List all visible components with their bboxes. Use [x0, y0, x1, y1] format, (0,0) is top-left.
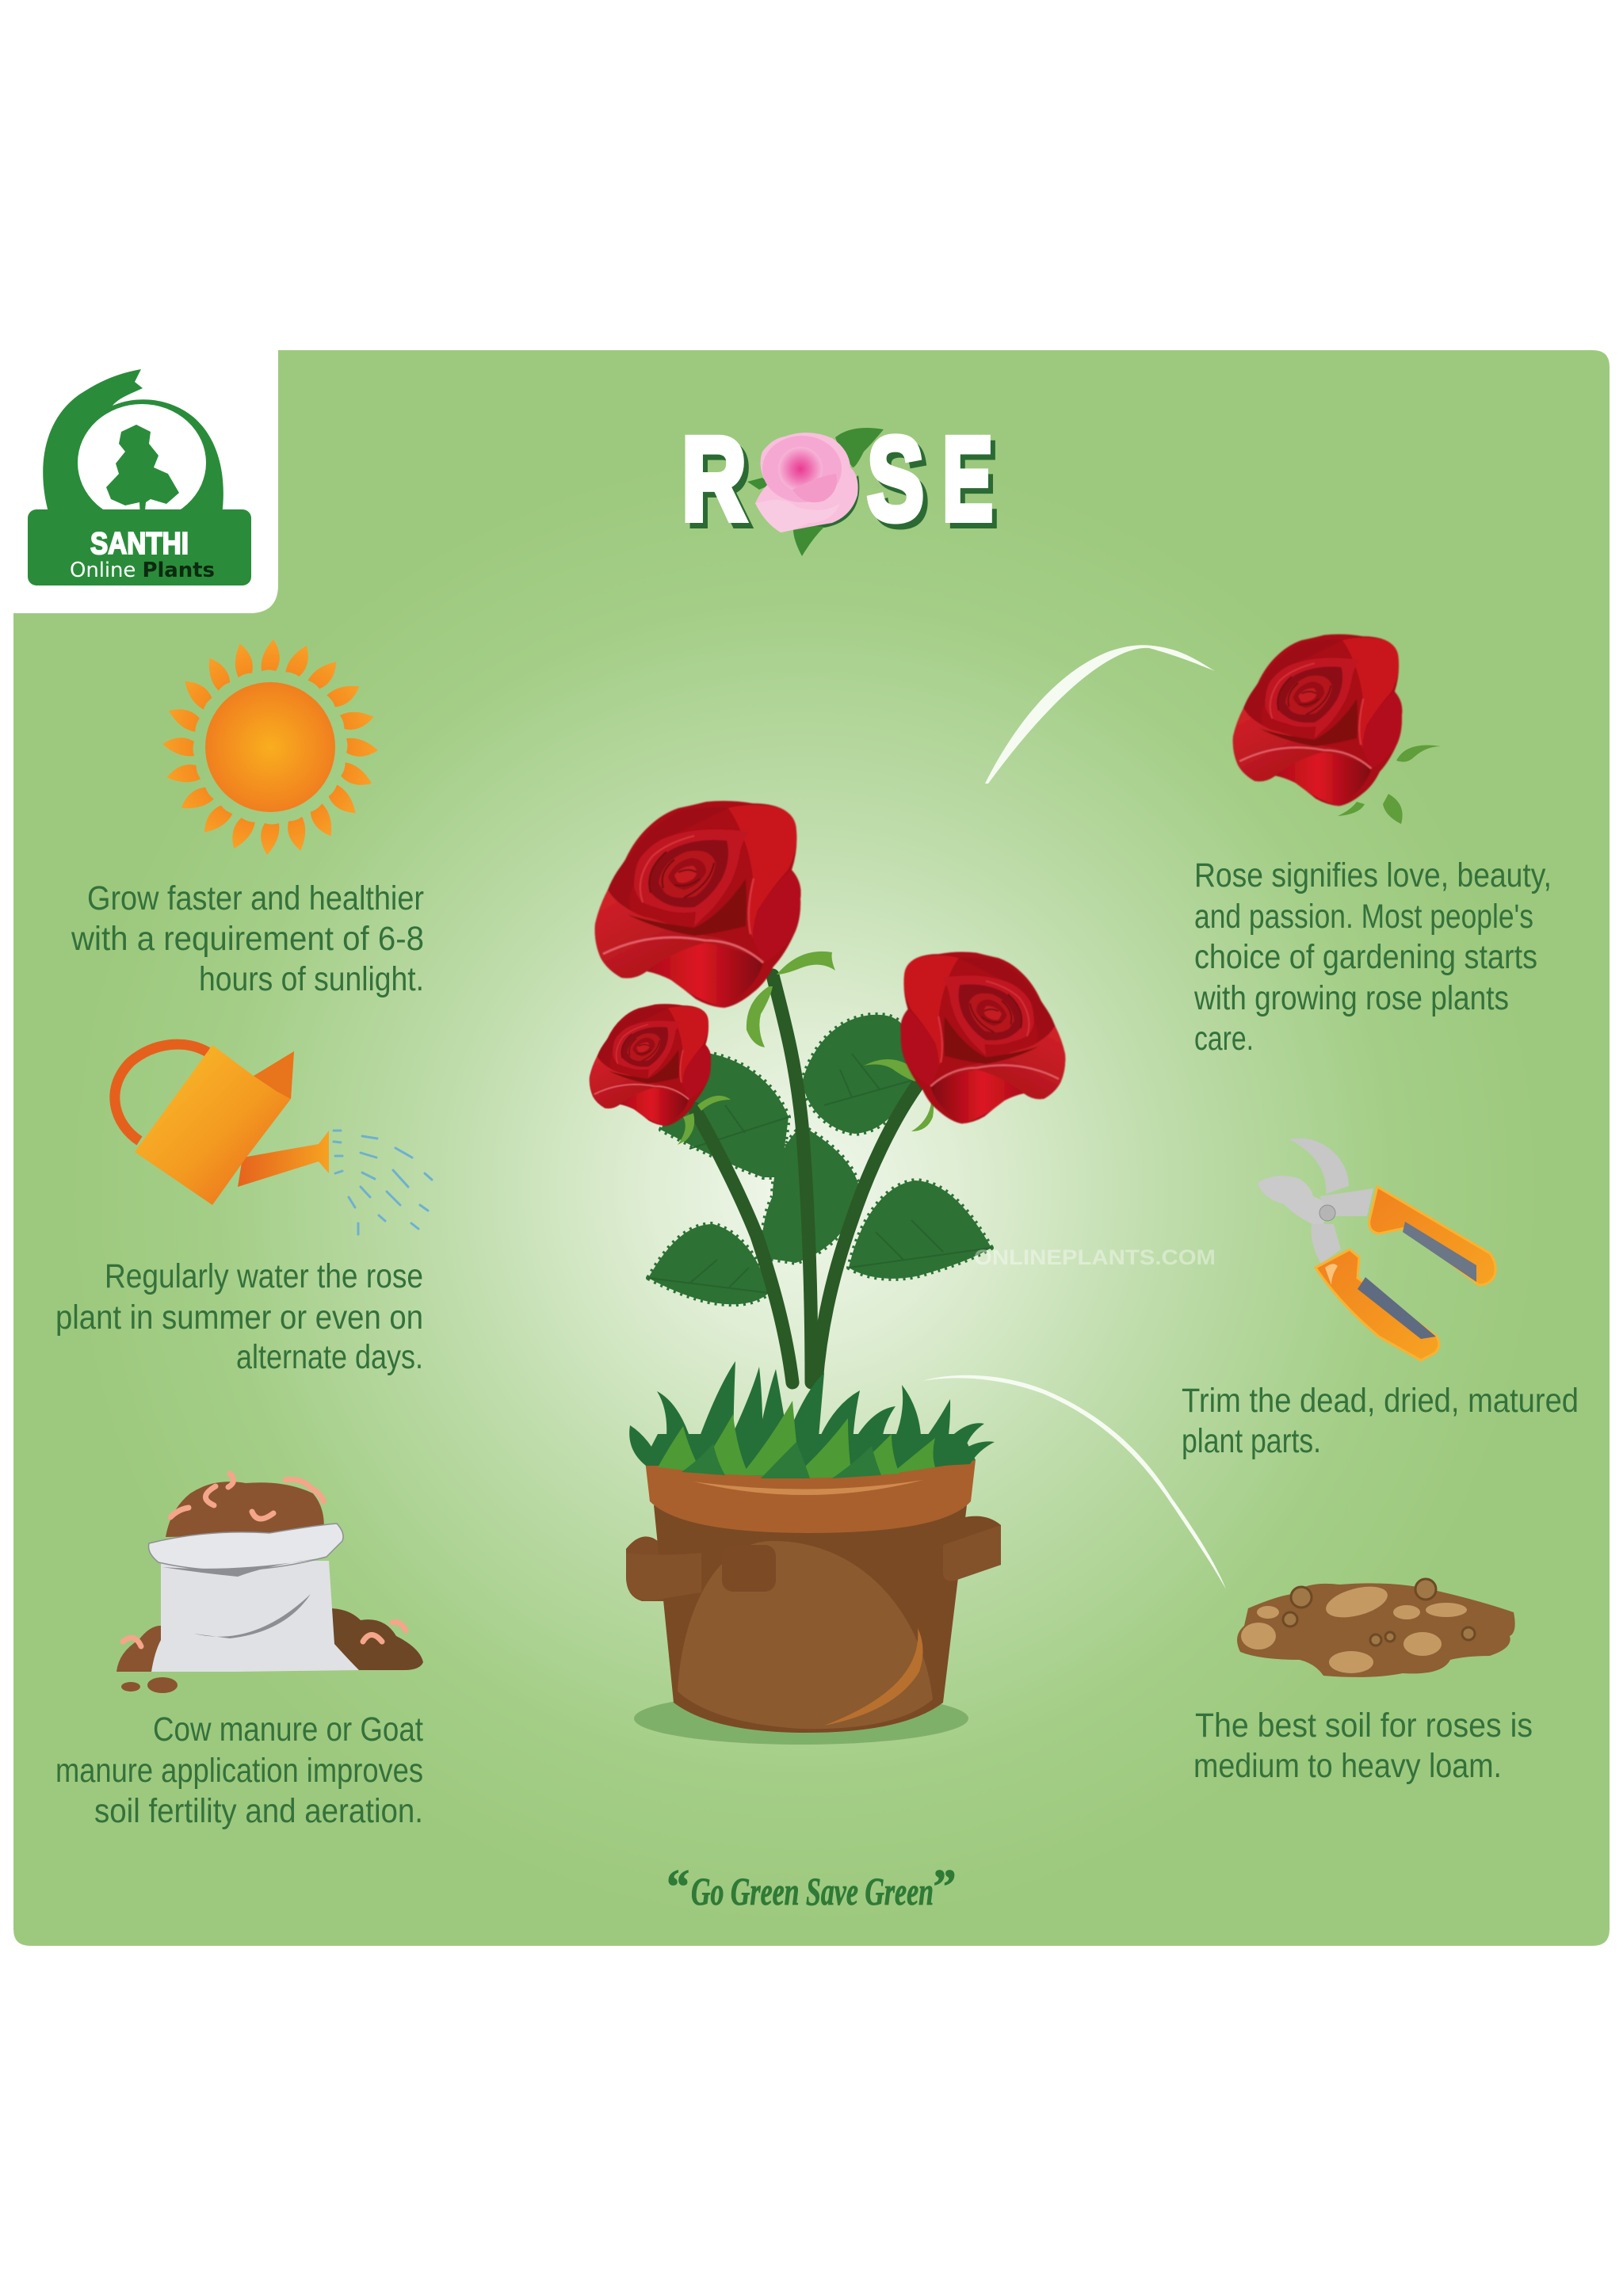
lower handle	[1316, 1249, 1439, 1360]
text: meaning: with growing rose plants	[1193, 979, 1509, 1017]
text: watering: plant in summer or even on	[55, 1299, 423, 1337]
panel: green background	[13, 350, 1610, 1946]
title: ROSE	[682, 412, 998, 556]
pot handles	[626, 1516, 1001, 1601]
pot rim	[645, 1460, 976, 1533]
text: meaning: Rose signifies love, beauty,	[1194, 856, 1552, 894]
pot front patch	[678, 1541, 933, 1729]
title letter shadows	[686, 418, 998, 551]
title letter shadows: E	[947, 418, 998, 551]
icon: manure sack	[116, 1474, 423, 1693]
soil pebbles	[1283, 1579, 1475, 1646]
icon: soil heap	[1237, 1579, 1515, 1677]
pot body	[654, 1505, 967, 1733]
text: soil: The best soil for roses is	[1195, 1707, 1533, 1745]
logo ring	[43, 369, 223, 515]
text: watering: alternate days.	[236, 1338, 423, 1376]
slogan	[664, 1860, 955, 1914]
water spray	[334, 1131, 432, 1234]
watermark: ONLINEPLANTS.COM	[974, 1245, 1216, 1269]
text: meaning: and passion. Most people's	[1194, 898, 1533, 936]
text: manure: Cow manure or Goat	[153, 1711, 423, 1749]
sun rays	[162, 639, 378, 855]
slogan: Go Green Save Green	[691, 1869, 934, 1913]
title rose leaves	[747, 428, 884, 556]
leaves	[648, 1015, 991, 1304]
worms	[123, 1474, 406, 1646]
text: sunlight: hours of sunlight.	[199, 960, 424, 998]
logo band	[28, 509, 251, 585]
text: sunlight: with a requirement of 6-8	[71, 920, 424, 958]
arrow: curve to top rose	[985, 645, 1215, 784]
logo tree	[106, 425, 179, 519]
can spout	[238, 1131, 329, 1187]
soil mass	[1237, 1583, 1515, 1677]
soil highlights	[1241, 1581, 1467, 1673]
logo: Santhi Online Plants	[28, 369, 251, 585]
title letter shadows: R	[686, 418, 751, 551]
rose flowers	[590, 801, 1065, 1126]
can body	[135, 1045, 294, 1205]
can handle	[115, 1044, 208, 1141]
text: meaning	[1193, 856, 1552, 1058]
stems	[694, 975, 919, 1383]
arrow: curve to soil	[922, 1375, 1226, 1589]
icon: watering can	[115, 1044, 432, 1234]
shear bolt	[1319, 1205, 1335, 1221]
text: soil: medium to heavy loam.	[1193, 1747, 1502, 1785]
leaf veins	[648, 1054, 991, 1293]
shear blades	[1289, 1138, 1349, 1194]
sun disc	[205, 682, 335, 812]
text: watering	[55, 1257, 423, 1376]
pot shadow	[634, 1692, 968, 1745]
logo inner circle	[78, 404, 206, 521]
title pink rose	[755, 433, 858, 532]
slogan: ”	[930, 1860, 955, 1914]
manure pile	[166, 1482, 324, 1537]
logo wordmark: SANTHI	[90, 527, 189, 561]
title letters: E	[942, 412, 993, 545]
title letters: R	[682, 412, 747, 545]
text: meaning: choice of gardening starts	[1194, 938, 1537, 976]
text: watering: Regularly water the rose	[105, 1257, 423, 1295]
title letter shadows: S	[872, 418, 929, 551]
title letters	[682, 412, 993, 545]
upper handle	[1369, 1187, 1495, 1285]
text: sunlight: Grow faster and healthier	[87, 879, 424, 917]
pot tabs	[626, 1525, 1001, 1601]
sepals	[678, 952, 934, 1145]
sack roll	[149, 1524, 343, 1570]
icon: sun	[162, 639, 378, 855]
rose sepals	[1338, 745, 1441, 824]
text: soil	[1193, 1707, 1533, 1785]
slogan: “	[664, 1860, 689, 1914]
grass	[629, 1361, 995, 1478]
text: manure: manure application improves	[55, 1752, 423, 1790]
text: sunlight	[71, 879, 424, 998]
rose plant in pot	[590, 801, 1065, 1745]
title letters: S	[867, 412, 924, 545]
spilled manure	[116, 1626, 163, 1672]
text: manure: soil fertility and aeration.	[94, 1792, 423, 1830]
text: meaning: care.	[1194, 1020, 1254, 1058]
icon: single red rose	[1233, 635, 1441, 824]
text: manure	[55, 1711, 423, 1830]
text: pruning	[1182, 1382, 1579, 1460]
text: pruning: plant parts.	[1182, 1422, 1321, 1460]
icon: pruning shears	[1258, 1138, 1495, 1360]
sack body	[151, 1561, 359, 1672]
logo tagline: Online Plants	[70, 559, 215, 582]
text: pruning: Trim the dead, dried, matured	[1182, 1382, 1579, 1420]
